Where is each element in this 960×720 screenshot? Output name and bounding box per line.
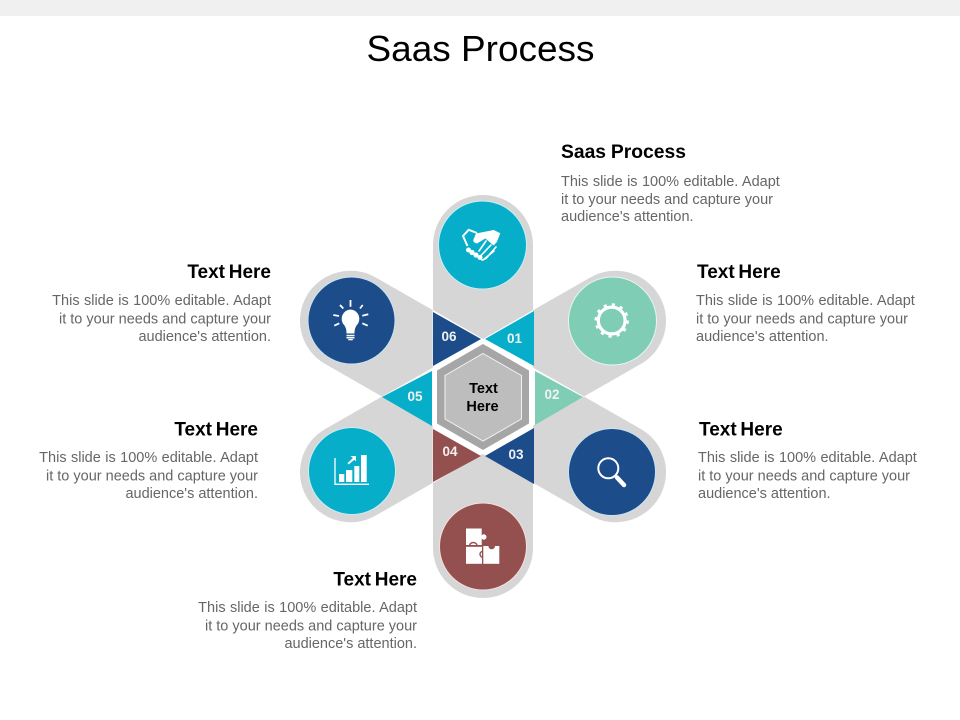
title: Saas Process <box>366 28 594 69</box>
text block: upper right: This slide is 100% editable. Adapt <box>696 293 915 309</box>
text block: upper right: it to your needs and capture your <box>696 312 908 328</box>
segment 05 <box>382 371 432 426</box>
text block: upper left <box>52 262 271 345</box>
text block: bottom <box>198 570 417 652</box>
text block: bottom: Text Here <box>333 570 417 590</box>
center hexagon: Text <box>469 381 498 397</box>
segment 02: 02 <box>544 387 560 402</box>
text block: Saas Process: it to your needs and capture your <box>561 192 773 208</box>
segment 04 <box>433 429 481 482</box>
circle: puzzle icon <box>440 503 526 590</box>
text block: Saas Process: This slide is 100% editable. Adapt <box>561 174 780 190</box>
segment 02 <box>535 371 583 425</box>
circle: handshake icon <box>438 201 526 289</box>
circle: magnifier icon <box>568 428 656 516</box>
text block: upper left: audience's attention. <box>138 329 271 345</box>
petal capsules <box>282 195 684 598</box>
segment 06 <box>433 312 481 366</box>
text block: bottom: This slide is 100% editable. Adapt <box>198 600 417 616</box>
text block: lower right: audience's attention. <box>698 486 831 502</box>
text block: lower left <box>39 420 258 502</box>
circle: light bulb icon <box>308 277 395 364</box>
text block: lower right: it to your needs and capture your <box>698 468 910 484</box>
text block: upper right <box>696 262 915 345</box>
text block: lower left: audience's attention. <box>125 486 258 502</box>
text block: lower left: This slide is 100% editable. Adapt <box>39 450 258 466</box>
text block: Saas Process: Saas Process <box>561 142 686 163</box>
text block: bottom: audience's attention. <box>284 636 417 652</box>
text block: Saas Process: audience's attention. <box>561 209 694 225</box>
segment 06: 06 <box>441 329 457 344</box>
text block: bottom: it to your needs and capture your <box>205 618 417 634</box>
center hexagon: Here <box>466 399 499 415</box>
circle: bar chart icon <box>308 428 396 514</box>
text block: upper right: audience's attention. <box>696 329 829 345</box>
text block: upper left: This slide is 100% editable. Adapt <box>52 293 271 309</box>
segment 03: 03 <box>508 447 524 462</box>
segment 03 <box>485 428 534 484</box>
text block: upper left: Text Here <box>187 262 271 283</box>
text block: Saas Process <box>561 142 780 225</box>
diagram: six-petal process <box>282 195 684 598</box>
text block: upper right: Text Here <box>697 262 781 283</box>
center hexagon <box>437 344 529 450</box>
segment 05: 05 <box>407 389 423 404</box>
text block: lower left: it to your needs and capture your <box>46 468 258 484</box>
text block: lower left: Text Here <box>174 420 258 440</box>
segment 01 <box>485 311 534 366</box>
segment 04: 04 <box>442 444 458 459</box>
text block: lower right <box>698 420 917 502</box>
text block: upper left: it to your needs and capture your <box>59 312 271 328</box>
text block: lower right: This slide is 100% editable. Adapt <box>698 450 917 466</box>
circle: gear icon <box>568 277 656 365</box>
text block: lower right: Text Here <box>699 420 783 440</box>
segment 01: 01 <box>507 331 522 346</box>
